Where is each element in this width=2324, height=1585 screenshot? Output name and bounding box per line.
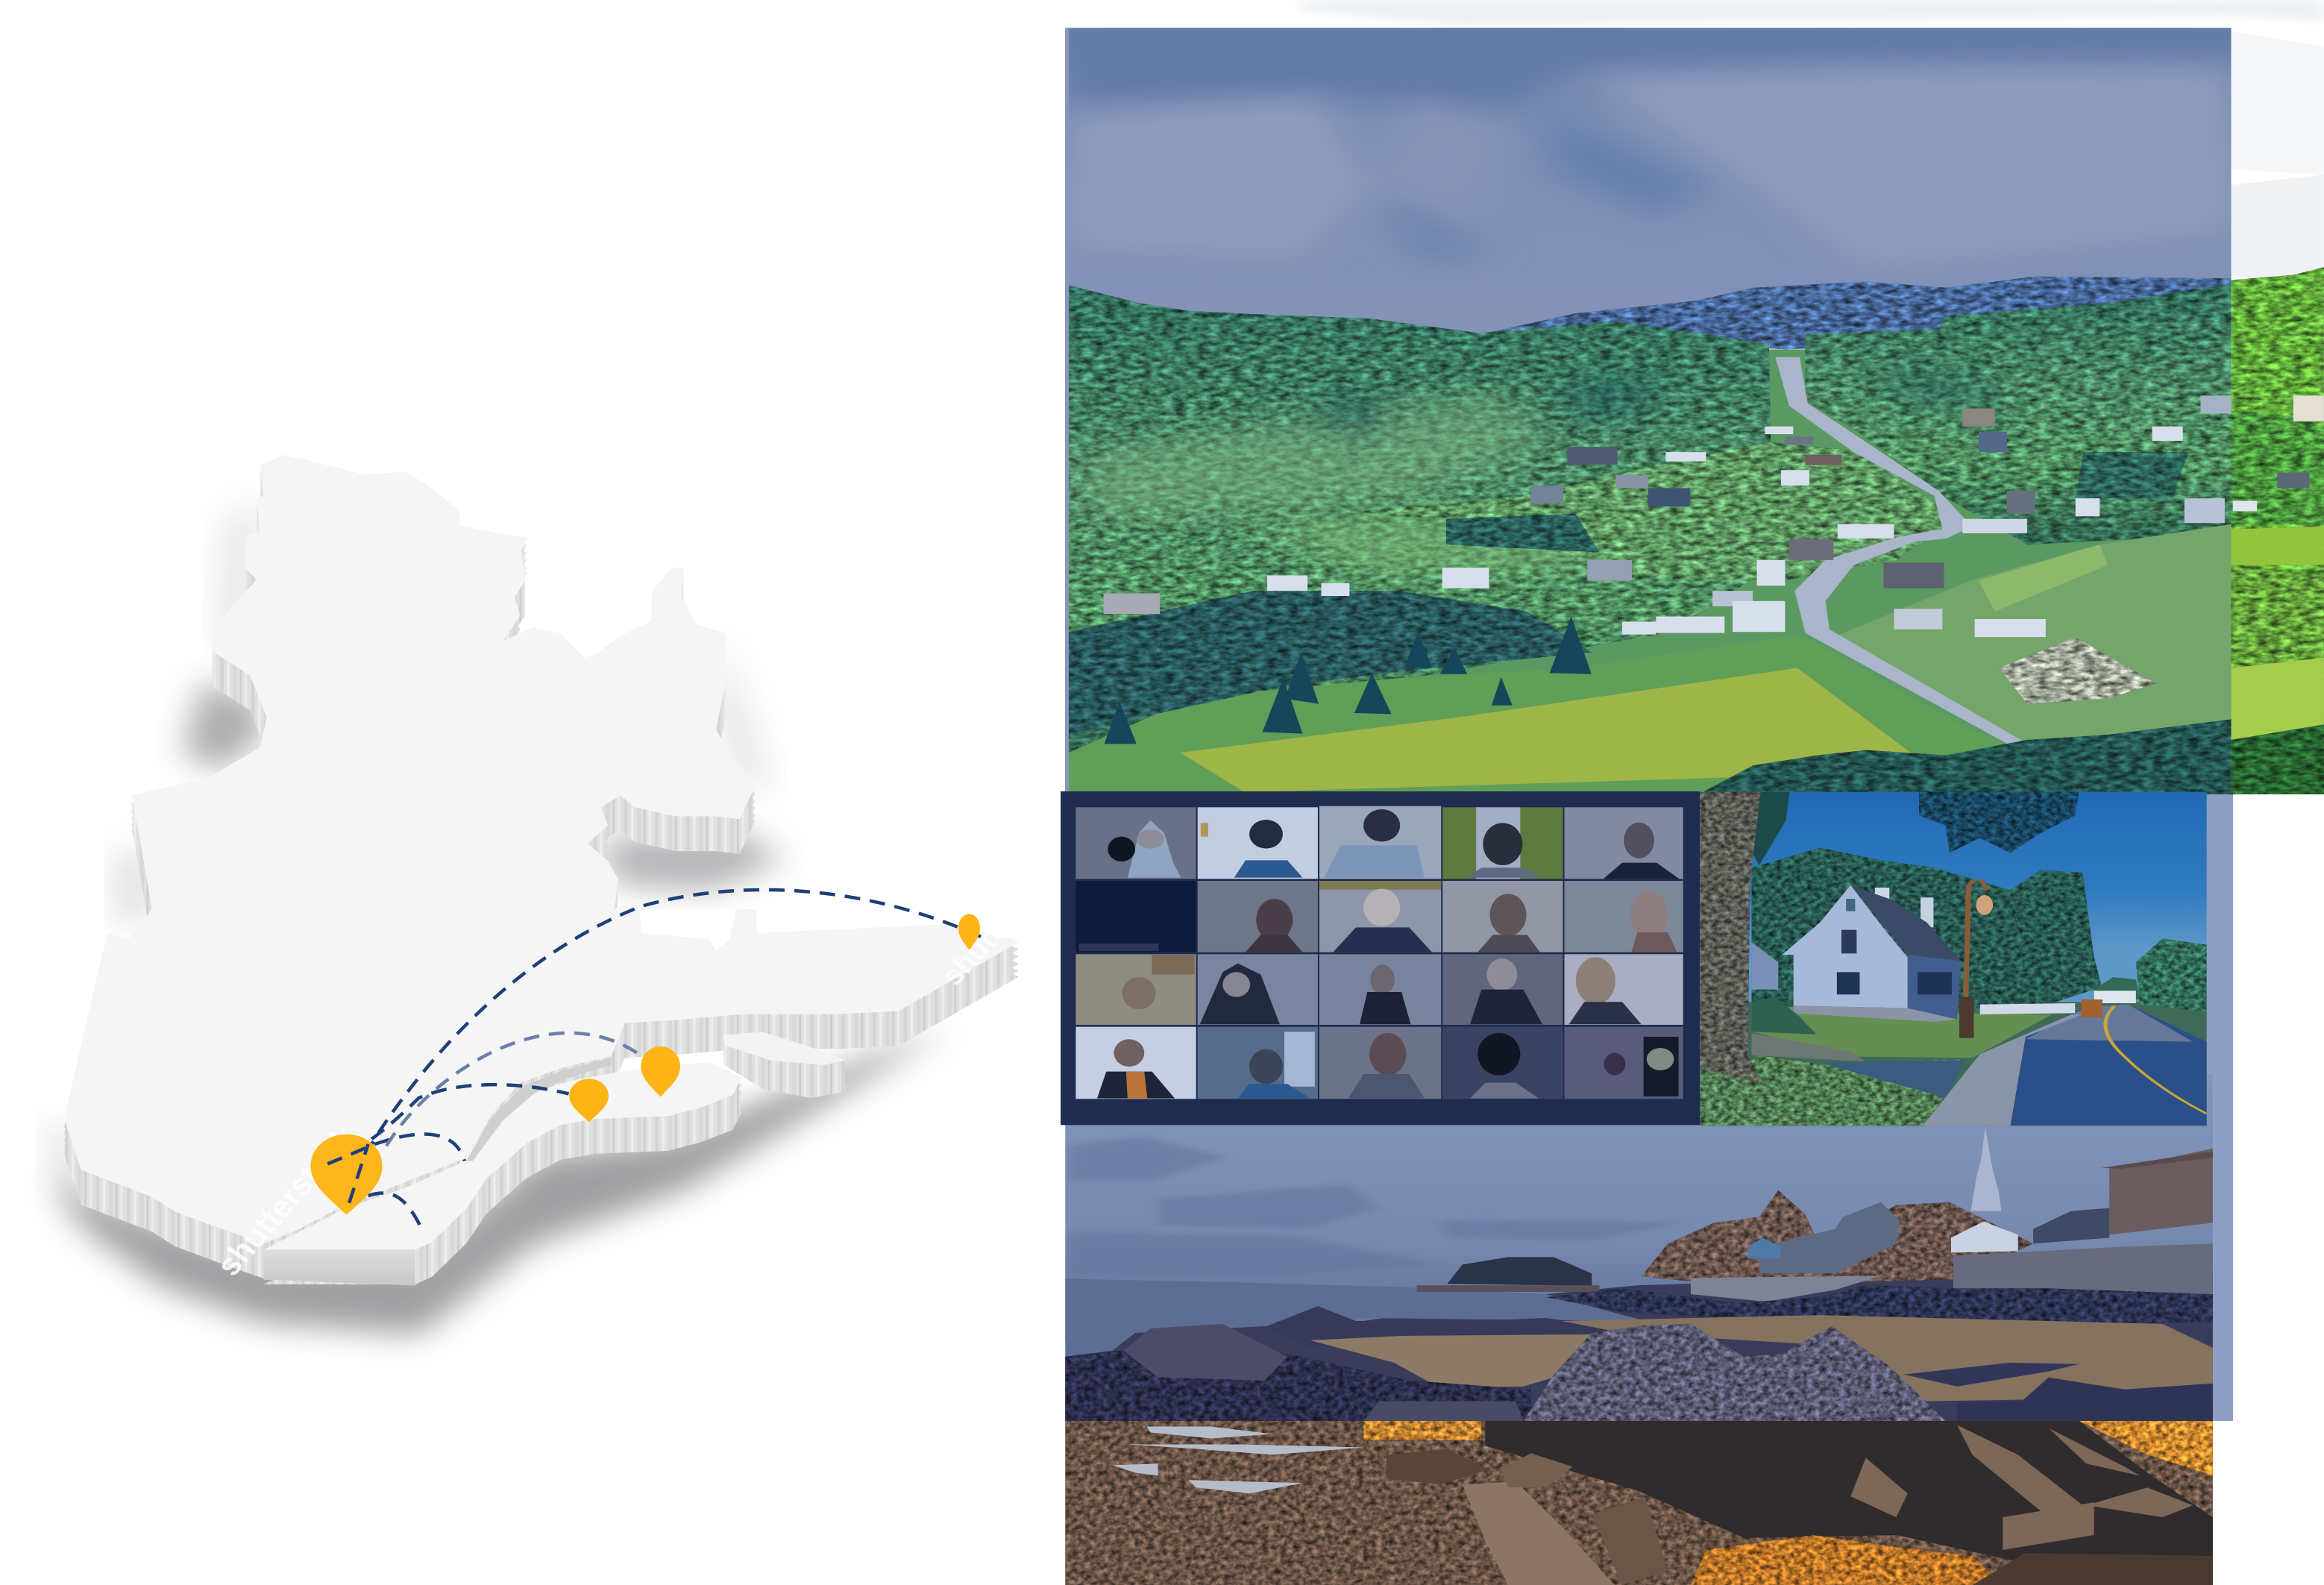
dark seaweed ground xyxy=(1065,1351,1531,1421)
sunlit road section xyxy=(2026,1005,2193,1042)
road xyxy=(1775,357,2037,751)
light forest patches xyxy=(1083,370,2011,575)
row 4 participants xyxy=(1075,1027,1683,1099)
pin: eastern shore xyxy=(958,914,980,950)
north and west land walls xyxy=(64,462,1019,1278)
faint clouds xyxy=(1068,1137,1683,1276)
pale blue left edge of panel xyxy=(1065,28,1069,798)
windows xyxy=(1841,930,1856,953)
house roof xyxy=(1850,885,1961,961)
orange grass foreground xyxy=(1691,1535,2003,1585)
village houses xyxy=(1747,1202,2018,1273)
tree trunk xyxy=(1700,792,1763,1084)
big triangular rocks xyxy=(1523,1324,1946,1421)
foreground ground without overlay xyxy=(1065,1421,2213,1585)
lower base of rocks and grass xyxy=(1065,1267,2213,1421)
video call panel xyxy=(1061,791,1700,1125)
map of Quebec xyxy=(47,455,1019,1335)
clouds xyxy=(1069,28,2232,267)
low point shoreline xyxy=(1417,1285,1599,1292)
orange dry grass top left xyxy=(1363,1421,1481,1440)
blue sky xyxy=(1700,792,2207,1016)
faint map watermark text xyxy=(210,920,1010,1282)
gable wall xyxy=(1782,885,1908,1008)
row 2 participants xyxy=(1075,881,1683,952)
outer right strip of the photo xyxy=(2232,31,2324,802)
conifer trees xyxy=(1105,617,1592,744)
foreground trees along bottom xyxy=(1704,719,2232,797)
church spire xyxy=(1970,1126,2001,1211)
sky with clouds under the blue panel xyxy=(1065,28,2237,797)
neighbouring house left xyxy=(1752,942,1778,990)
rock ridges xyxy=(1850,1425,2193,1550)
right low rocks xyxy=(1904,1363,2079,1387)
yellow centre lines xyxy=(2105,1005,2207,1114)
tree mass behind house xyxy=(1752,848,2102,1008)
white fence xyxy=(1980,1003,2075,1014)
village trees xyxy=(1642,1190,2033,1285)
dark central rock mass xyxy=(1485,1421,2213,1585)
leaves left xyxy=(1747,792,1790,865)
lamp post xyxy=(1965,880,1986,1038)
right forested hillside xyxy=(1805,283,2232,544)
faint map watermark text: shutt xyxy=(935,920,1010,991)
lamp base xyxy=(1959,997,1974,1038)
row 1 participants xyxy=(1075,806,1683,879)
left rock group xyxy=(1124,1324,1287,1381)
right slopes xyxy=(1833,524,2232,745)
blue panel side strip xyxy=(2200,794,2233,1421)
foreground mid rocks xyxy=(1463,1481,1615,1585)
yellow field xyxy=(1180,668,1914,792)
dry grass xyxy=(1561,1315,2213,1404)
south shore walls xyxy=(263,1070,741,1284)
orange grass top right xyxy=(2079,1421,2213,1475)
photo: coastal village with blue overlay xyxy=(1065,794,2234,1585)
garden shrubs xyxy=(1752,997,1816,1035)
large building at right xyxy=(2033,1149,2213,1243)
orange car xyxy=(2081,999,2102,1017)
sea wall xyxy=(1953,1243,2213,1296)
foreground meadow xyxy=(1069,635,2035,794)
bottom left lawn xyxy=(1700,1055,1965,1126)
sky xyxy=(1065,1074,2213,1342)
Anticosti island xyxy=(723,1032,846,1098)
distant island trees xyxy=(1447,1257,1592,1286)
St Lawrence river wall xyxy=(466,1058,612,1161)
distant ridge xyxy=(1486,277,2232,349)
bare dirt patch xyxy=(1999,637,2156,704)
stone wall xyxy=(1752,1033,1866,1061)
chimneys xyxy=(1875,888,1889,908)
mid meadows and village ground xyxy=(1334,442,1955,580)
panel background xyxy=(1061,791,1700,1125)
pin: Montreal area xyxy=(311,1134,383,1215)
upper lawn xyxy=(1752,1007,2053,1058)
village houses xyxy=(1103,395,2237,637)
shaded side wall xyxy=(1908,955,1961,1020)
northern land top face xyxy=(64,455,1019,1243)
foundation xyxy=(1794,1005,1957,1022)
standing water patches xyxy=(1112,1427,1363,1493)
pin: Quebec City area xyxy=(569,1079,609,1122)
right trees xyxy=(2136,938,2207,1012)
dark shoreline rocks xyxy=(1546,1285,2213,1324)
overhanging leaves top xyxy=(1919,792,2079,853)
row 3 participants xyxy=(1075,954,1683,1025)
dash overlay on large pin xyxy=(327,1144,375,1203)
unfiltered sky behind the panel xyxy=(1059,0,2324,802)
hillside ground base xyxy=(1416,349,2136,794)
faint map watermark text: shutterstock xyxy=(210,1120,364,1282)
dashed route lines xyxy=(327,890,989,1225)
grey clouds at top edge xyxy=(1301,0,2324,25)
white house xyxy=(1782,885,1961,1022)
left forested hillside xyxy=(1069,285,1773,756)
photo: rural valley xyxy=(1059,0,2324,802)
sea over base xyxy=(1065,1278,1645,1357)
pin: Saguenay area xyxy=(641,1046,680,1096)
distant trees and white building xyxy=(2094,977,2140,999)
sidewalk xyxy=(1923,1014,2082,1126)
map drop shadow xyxy=(47,495,946,1335)
south land front wall xyxy=(263,1249,415,1286)
dark conifer band xyxy=(1069,591,1592,735)
mid seaweed rocks xyxy=(1265,1306,1607,1348)
lantern xyxy=(1976,895,1993,915)
white page edge beside foreground xyxy=(2213,1421,2234,1585)
south land and Gaspe top face xyxy=(263,1062,741,1249)
driveway shadow xyxy=(1820,1061,1965,1098)
road xyxy=(2006,1005,2207,1126)
ground base xyxy=(1700,1002,2207,1126)
photo: white house on village street xyxy=(1700,792,2207,1126)
